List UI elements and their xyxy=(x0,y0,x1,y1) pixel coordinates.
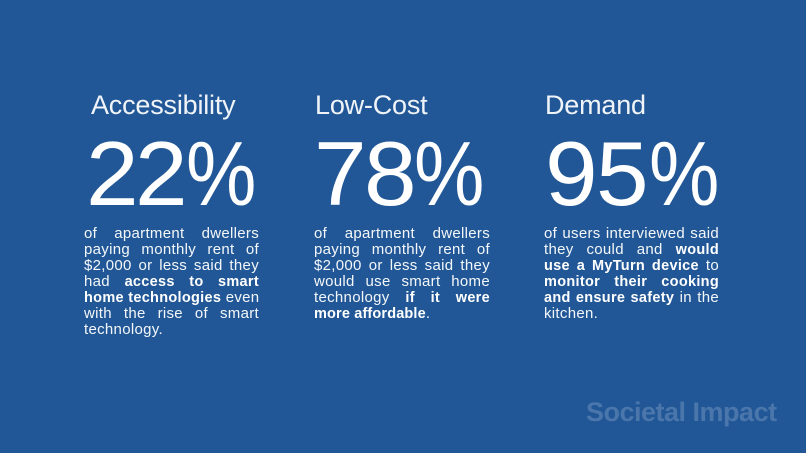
text block: demand description: they could and would xyxy=(544,241,719,258)
text block: low-cost description xyxy=(314,225,490,322)
text block: demand description xyxy=(544,225,719,322)
text block: accessibility description: of apartment dwellers xyxy=(84,225,259,242)
text block: accessibility description: paying monthly rent of xyxy=(84,241,259,258)
text block: accessibility description: home technologies even xyxy=(84,289,259,306)
column: low-cost xyxy=(314,90,490,322)
stat: 95%: 5 xyxy=(596,124,649,225)
stat: 78% xyxy=(314,124,484,225)
stat: 95%: % xyxy=(649,124,719,225)
text block: low-cost description: of apartment dwellers xyxy=(314,225,490,242)
text block: accessibility description: technology. xyxy=(84,321,163,338)
text block: demand description: and ensure safety in the xyxy=(544,289,719,306)
stat: 22% xyxy=(86,124,256,225)
text block: demand description: monitor their cooking xyxy=(544,274,719,290)
stat: 78%: % xyxy=(414,124,484,225)
text block: accessibility description: with the rise of smart xyxy=(84,305,259,322)
stat: 22%: % xyxy=(186,124,256,225)
text block: low-cost description: more affordable. xyxy=(314,305,430,322)
heading: Accessibility: Accessibility xyxy=(91,90,235,120)
text block: accessibility description: had access to smart xyxy=(84,273,259,290)
text block: low-cost description: would use smart home xyxy=(314,273,490,290)
stat: 22%: 2 xyxy=(135,124,188,225)
stat: 95%: 9 xyxy=(545,124,598,225)
text block: low-cost description: paying monthly rent of xyxy=(314,241,490,258)
text block: accessibility description: $2,000 or less said they xyxy=(84,257,259,274)
text block: accessibility description xyxy=(84,225,259,338)
column: accessibility xyxy=(84,90,259,338)
stat: 78%: 7 xyxy=(314,124,367,225)
column: demand xyxy=(544,90,719,322)
stat: 78%: 8 xyxy=(364,124,417,225)
stat: 22%: 2 xyxy=(86,124,139,225)
heading: Low-Cost: Low-Cost xyxy=(315,90,427,120)
text block: low-cost description: technology if it were xyxy=(314,289,490,306)
heading: Demand: Demand xyxy=(545,90,646,120)
text block: demand description: kitchen. xyxy=(544,305,598,322)
text block: demand description: of users interviewed said xyxy=(544,225,719,242)
text block: demand description: use a MyTurn device to xyxy=(544,257,719,274)
text block: low-cost description: $2,000 or less said they xyxy=(314,257,490,274)
logo wordmark: Societal Impact: Societal Impact xyxy=(586,397,777,427)
stat: 95% xyxy=(545,124,719,225)
